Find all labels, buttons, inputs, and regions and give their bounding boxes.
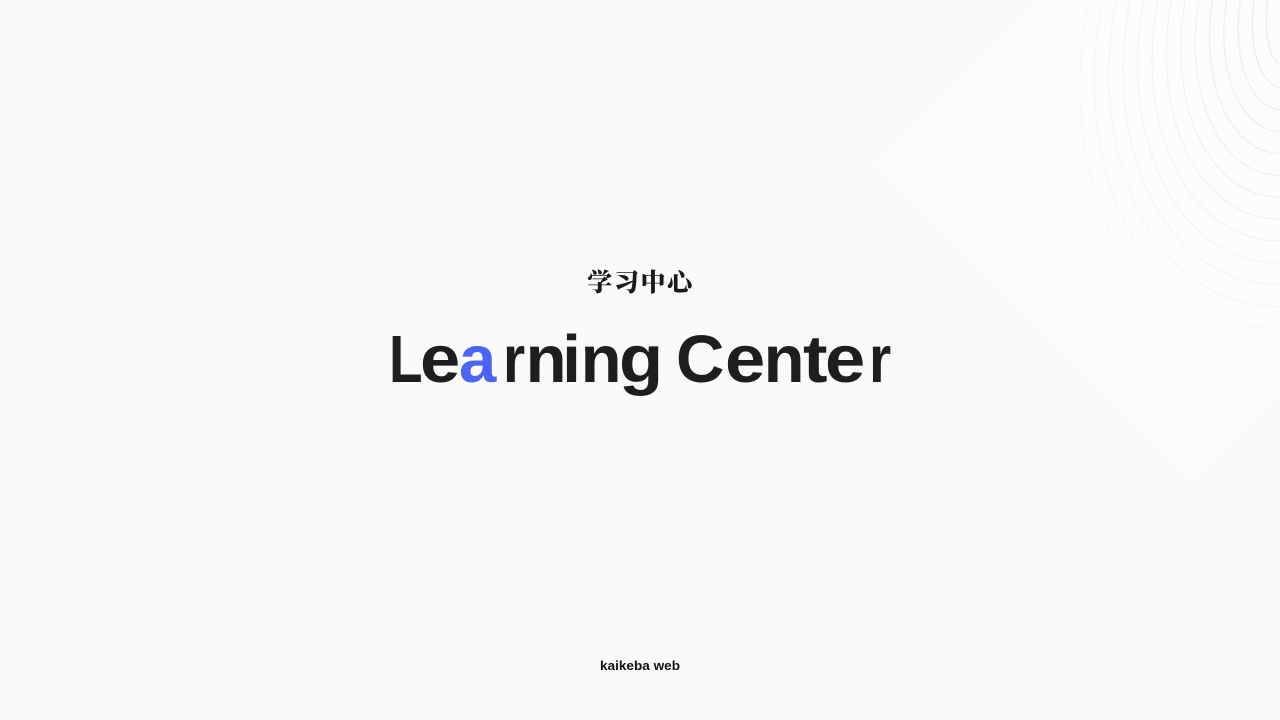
main title: e	[725, 322, 766, 397]
main title: i	[562, 322, 581, 397]
main title: r	[869, 322, 891, 397]
main title: r	[503, 322, 525, 397]
main title: e	[420, 322, 461, 397]
main title: n	[764, 322, 805, 397]
main title	[389, 322, 891, 397]
main title: g	[619, 322, 663, 397]
main title: n	[581, 322, 622, 397]
main title: t	[803, 322, 828, 397]
main title: n	[526, 322, 567, 397]
main title: e	[825, 322, 866, 397]
decorative concentric rings	[990, 0, 1280, 441]
main title: C	[676, 322, 724, 397]
chinese heading: 学习中心	[587, 269, 696, 297]
main title: a	[459, 322, 496, 397]
footer brand label: kaikeba web	[600, 658, 680, 673]
main title: L	[389, 322, 423, 397]
